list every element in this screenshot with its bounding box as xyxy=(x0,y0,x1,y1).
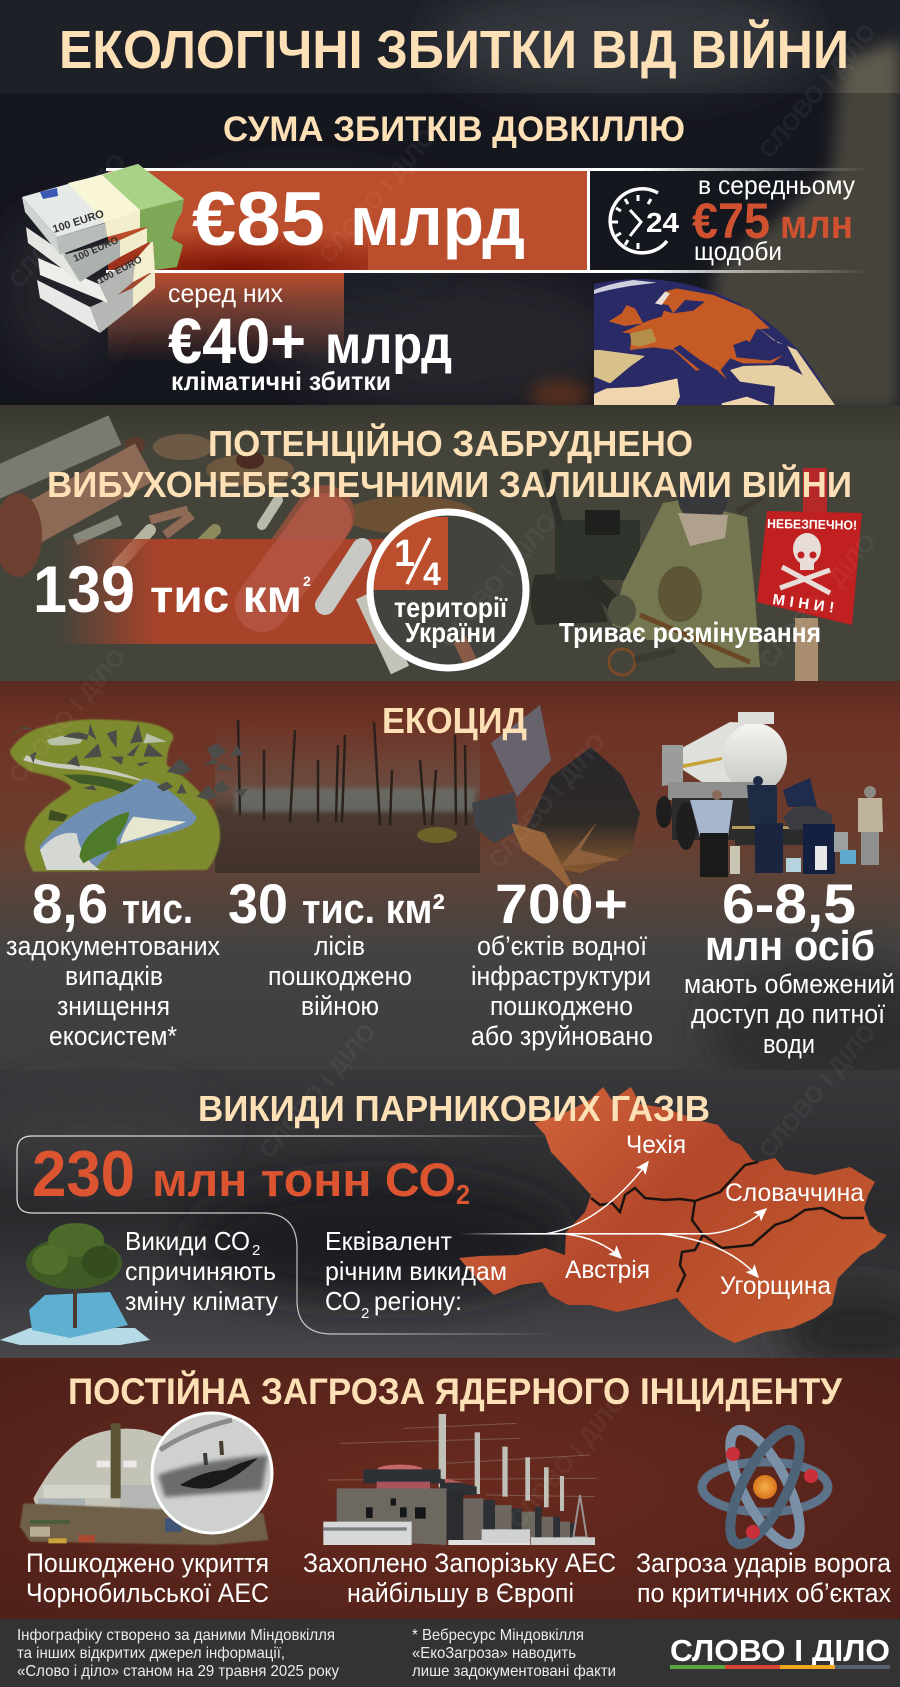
section background xyxy=(0,1070,900,1358)
climate damages: серед них xyxy=(168,278,283,308)
text: demining continues: Триває розмінування xyxy=(559,617,821,648)
panel: ecocide xyxy=(0,681,900,1100)
climate damages: кліматичні збитки xyxy=(171,366,391,396)
image: tree on iceberg xyxy=(0,1223,150,1345)
caption: Zaporizhzhia xyxy=(303,1548,616,1608)
frame lines xyxy=(106,168,870,273)
stat: water infrastructure: 700+ xyxy=(495,872,628,935)
text: regional equivalent: 2 xyxy=(361,1305,369,1322)
watermarks: СЛОВО І ДІЛО xyxy=(254,1019,382,1164)
figure: 139 thousand km2: 139 xyxy=(33,552,135,626)
circle: one quarter of territory: території xyxy=(394,592,508,623)
watermarks: СЛОВО І ДІЛО xyxy=(754,529,882,674)
amount: 85 bn euro: €85 xyxy=(192,177,325,262)
footnote: * Вебресурс Міндовкілля xyxy=(412,1627,584,1644)
map: neighbouring countries xyxy=(459,1087,887,1343)
image: burned forest xyxy=(215,720,480,873)
icon: money stack: 100 EURO xyxy=(72,235,121,265)
panel: explosive remnants xyxy=(0,405,900,681)
image: Chornobyl shelter xyxy=(20,1423,268,1545)
heading: ПОТЕНЦІЙНО ЗАБРУДНЕНО xyxy=(208,422,693,464)
map labels: Словаччина xyxy=(725,1179,864,1207)
text: CO2 causes climate change: спричиняють xyxy=(125,1256,276,1286)
amount unit: млрд xyxy=(350,182,525,260)
smoke xyxy=(0,1090,900,1370)
average per day: щодоби xyxy=(694,236,782,266)
outline frame xyxy=(17,1136,560,1334)
panel: nuclear threat xyxy=(0,1358,900,1619)
icon: 24-hour clock: 24 xyxy=(646,207,679,238)
stat: people without water: води xyxy=(763,1029,815,1059)
stat: forests: пошкоджено xyxy=(268,961,412,991)
text: regional equivalent: річним викидам xyxy=(325,1256,507,1286)
figure: 230 mln tonnes xyxy=(32,1137,470,1210)
footnote: лише задокументовані факти xyxy=(412,1663,616,1680)
icon: mine warning sign: НЕБЕЗПЕЧНО! xyxy=(767,516,857,533)
caption: Chornobyl: Пошкоджено укриття xyxy=(26,1548,269,1578)
circle: one quarter of territory: 1 xyxy=(394,533,415,575)
image: damaged pipe xyxy=(472,705,640,900)
stat: documented cases: задокументованих xyxy=(6,931,220,961)
watermarks: СЛОВО І ДІЛО xyxy=(4,644,132,789)
panel: sum of damages xyxy=(22,116,860,405)
stat: people without water: доступ до питної xyxy=(691,999,885,1029)
stat: forests: тис. км² xyxy=(302,885,445,932)
stat: water infrastructure: об’єктів водної xyxy=(477,931,647,961)
figure: 139 thousand km2: тис км xyxy=(150,570,302,622)
arrows xyxy=(459,1162,766,1277)
footer background xyxy=(0,1619,900,1687)
average per day xyxy=(692,170,855,266)
sources note xyxy=(17,1627,339,1680)
footer xyxy=(0,1619,900,1687)
map labels: Угорщина xyxy=(720,1272,831,1300)
background: smoke and dark sky xyxy=(0,0,900,411)
image: globe with Europe xyxy=(594,279,835,405)
icon: money stack: 100 EURO xyxy=(51,208,106,236)
stat: water infrastructure: пошкоджено xyxy=(490,991,633,1021)
section background xyxy=(0,405,900,681)
text: regional equivalent: СО xyxy=(325,1286,361,1316)
stat: water infrastructure: інфраструктури xyxy=(471,961,651,991)
figure: 139 thousand km2: 2 xyxy=(303,573,311,589)
caption: Chornobyl: Чорнобильської АЕС xyxy=(26,1578,269,1608)
stat: documented cases: тис. xyxy=(122,885,193,932)
logo: СЛОВО І ДІЛО xyxy=(670,1633,890,1668)
average per day: в середньому xyxy=(698,170,855,200)
panel: greenhouse emissions xyxy=(0,1070,900,1370)
watermarks: СЛОВО І ДІЛО xyxy=(4,149,132,294)
icon: mine warning sign: МІНИ! xyxy=(771,591,835,617)
dark smoke corner xyxy=(710,960,900,1100)
icon: money stack xyxy=(22,164,184,333)
watermarks: СЛОВО І ДІЛО xyxy=(314,124,442,269)
sources note: та інших відкритих джерел інформації, xyxy=(17,1645,285,1662)
image: hole in the shelter xyxy=(152,1413,272,1533)
sources note: «Слово і діло» станом на 29 травня 2025 року xyxy=(17,1663,339,1680)
footnote xyxy=(412,1627,616,1680)
average per day: €75 xyxy=(692,193,770,249)
icon: atom xyxy=(702,1421,828,1553)
text: regional equivalent: Еквівалент xyxy=(325,1226,452,1256)
caption: Zaporizhzhia: Захоплено Запорізьку АЕС xyxy=(303,1548,616,1578)
stat: forests xyxy=(228,872,445,1021)
map labels xyxy=(565,1131,864,1300)
text: CO2 causes climate change: Викиди СО xyxy=(125,1226,250,1256)
heading: СУМА ЗБИТКІВ ДОВКІЛЛЮ xyxy=(223,110,685,149)
climate damages: €40+ xyxy=(168,305,306,377)
icon: mine warning sign xyxy=(757,468,862,681)
red band xyxy=(60,539,385,644)
title: ЕКОЛОГІЧНІ ЗБИТКИ ВІД ВІЙНИ xyxy=(59,19,849,80)
text: CO2 causes climate change: зміну клімату xyxy=(125,1286,278,1316)
circle: one quarter of territory xyxy=(370,512,526,672)
watermarks: СЛОВО І ДІЛО xyxy=(434,509,562,654)
figure: 230 mln tonnes: 230 xyxy=(32,1137,135,1210)
footnote: «ЕкоЗагроза» наводить xyxy=(412,1645,576,1662)
map labels: Австрія xyxy=(565,1256,650,1284)
image: water tanker and people xyxy=(656,712,883,877)
icon: 24-hour clock xyxy=(610,189,679,253)
circle: one quarter of territory: України xyxy=(405,617,496,648)
average per day: млн xyxy=(780,203,853,247)
heading: ВИКИДИ ПАРНИКОВИХ ГАЗІВ xyxy=(198,1088,710,1129)
text: regional equivalent xyxy=(325,1226,507,1322)
image: wetland with birds xyxy=(10,719,248,872)
heading line two: ВИБУХОНЕБЕЗПЕЧНИМИ ЗАЛИШКАМИ ВІЙНИ xyxy=(47,463,852,505)
circle: one quarter of territory: 4 xyxy=(423,556,441,592)
section background xyxy=(0,1358,900,1619)
stat: documented cases xyxy=(6,872,220,1051)
climate damages: млрд xyxy=(325,315,452,375)
icon: money stack: 100 EURO xyxy=(96,254,144,287)
text: regional equivalent: регіону: xyxy=(374,1286,462,1316)
stat: water infrastructure xyxy=(471,872,653,1051)
figure: 230 mln tonnes: млн тонн СО xyxy=(152,1153,456,1206)
stat: forests: 30 xyxy=(228,872,288,935)
watermarks: СЛОВО І ДІЛО xyxy=(484,729,612,874)
watermarks: СЛОВО І ДІЛО xyxy=(754,1019,882,1164)
stat: forests: війною xyxy=(301,991,379,1021)
stat: people without water: млн осіб xyxy=(705,922,875,969)
stat: forests: лісів xyxy=(314,931,365,961)
image: Zaporizhzhia plant xyxy=(323,1414,597,1545)
stat: documented cases: 8,6 xyxy=(32,872,108,935)
section background xyxy=(0,681,900,1070)
text: CO2 causes climate change: 2 xyxy=(252,1242,260,1259)
stat: documented cases: екосистем* xyxy=(49,1021,177,1051)
caption: Chornobyl xyxy=(26,1548,269,1608)
caption: Zaporizhzhia: найбільшу в Європі xyxy=(347,1578,574,1608)
stat: documented cases: випадків xyxy=(65,961,163,991)
heading: ПОСТІЙНА ЗАГРОЗА ЯДЕРНОГО ІНЦИДЕНТУ xyxy=(68,1370,843,1412)
climate damages xyxy=(168,278,452,396)
stat: people without water xyxy=(684,872,895,1059)
stat: documented cases: знищення xyxy=(57,991,170,1021)
image: demining robot xyxy=(531,470,640,625)
lower red block xyxy=(108,273,344,363)
figure: 230 mln tonnes: 2 xyxy=(456,1179,470,1210)
text: CO2 causes climate change xyxy=(125,1226,278,1316)
stat: water infrastructure: або зруйновано xyxy=(471,1021,653,1051)
caption: threat of strikes xyxy=(636,1548,892,1608)
watermarks: СЛОВО І ДІЛО xyxy=(504,1389,632,1534)
sources note: Інфографіку створено за даними Міндовкілля xyxy=(17,1627,335,1644)
watermarks: СЛОВО І ДІЛО xyxy=(754,19,882,164)
red box: 85 bn xyxy=(108,171,587,270)
map labels: Чехія xyxy=(626,1131,686,1159)
red box shading xyxy=(108,225,368,270)
figure: 139 thousand km2 xyxy=(33,552,311,626)
stat: people without water: 6-8,5 xyxy=(722,872,856,935)
image: shells and mines xyxy=(0,430,476,670)
image: sapper xyxy=(608,473,762,675)
heading: ЕКОЦИД xyxy=(382,700,527,741)
